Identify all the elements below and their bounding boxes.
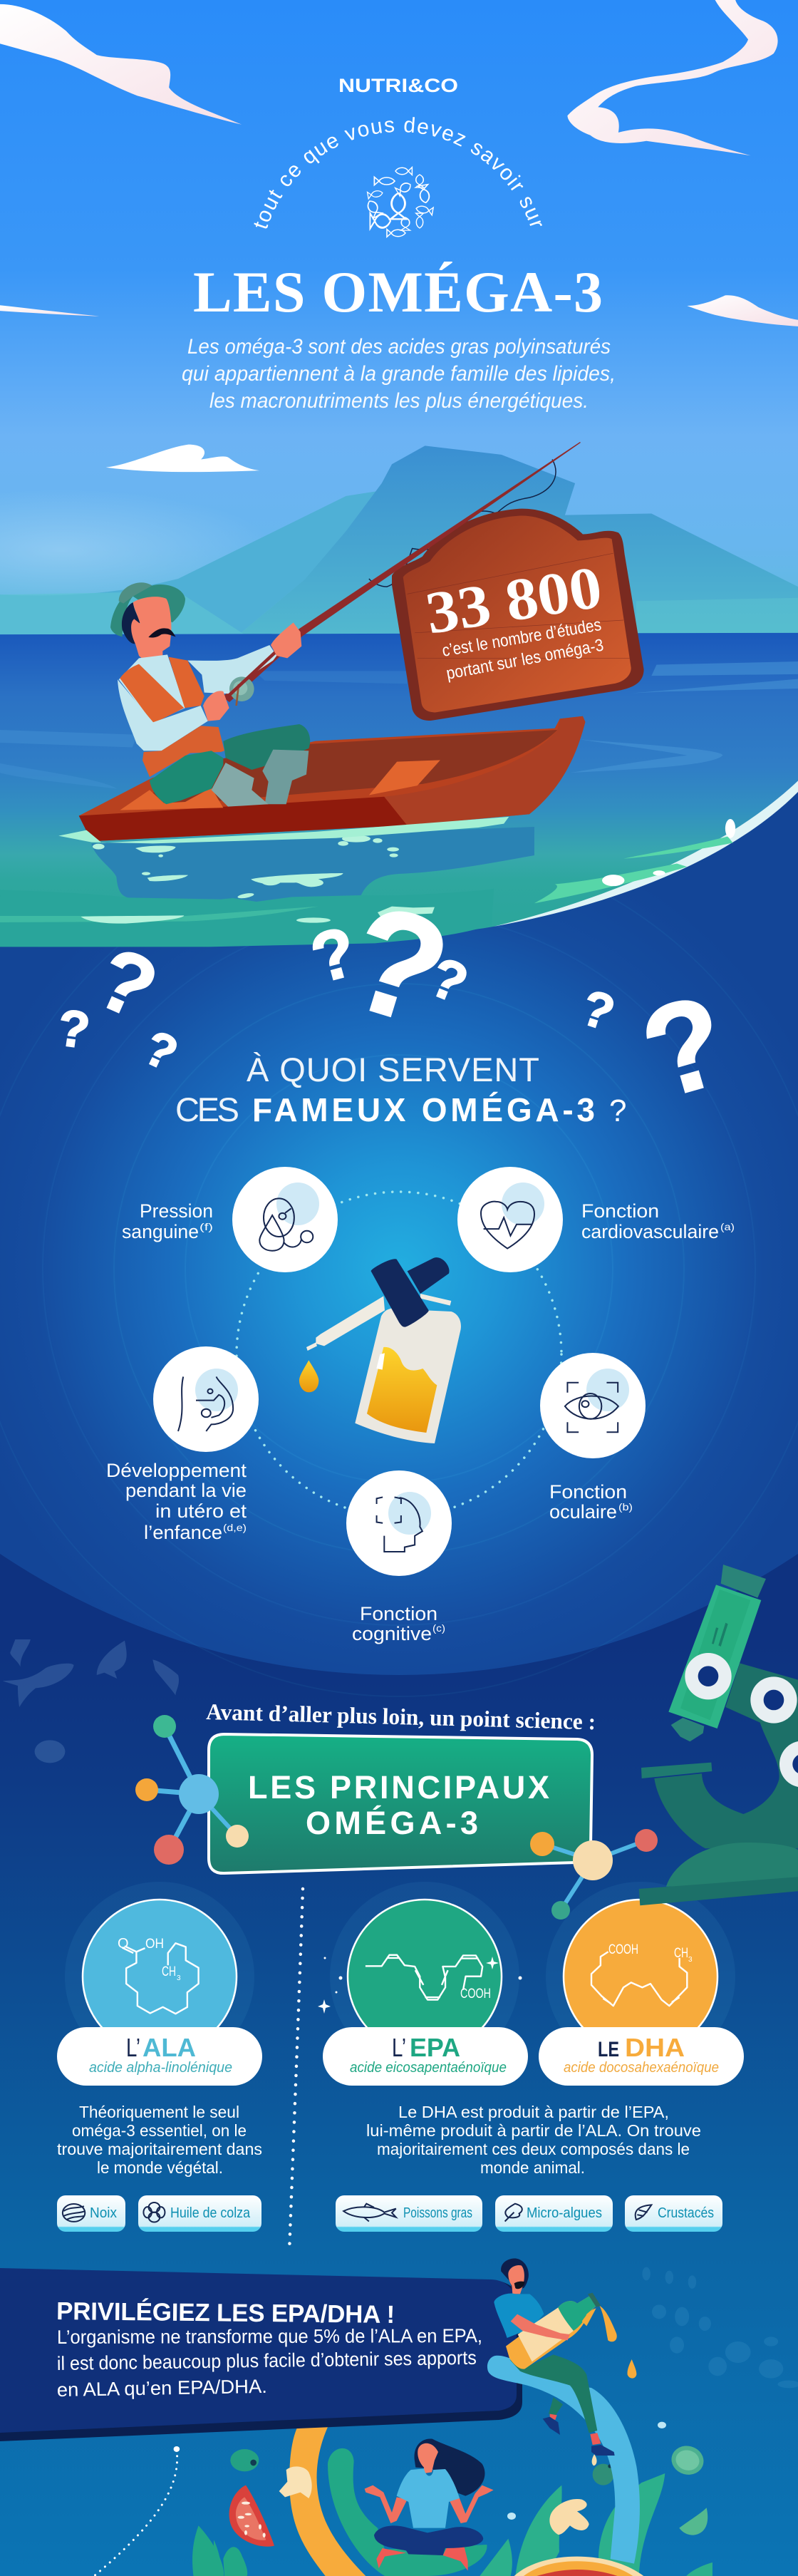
fishing line	[369, 460, 556, 587]
text: ALA description: trouve majoritairement dans	[57, 2140, 262, 2158]
circle: EPA	[330, 1882, 519, 2071]
scene: faint fish school and dotted trail	[94, 2267, 798, 2576]
sea	[0, 633, 798, 947]
soft light in the sky	[0, 503, 228, 594]
sky	[0, 0, 798, 642]
heading: functions: FAMEUX OMÉGA-3	[252, 1091, 595, 1128]
oil drop	[299, 1360, 318, 1392]
label: pression: Pression	[140, 1200, 213, 1222]
banner text: en ALA qu’en EPA/DHA.	[57, 2376, 267, 2401]
chip: noix	[57, 2195, 125, 2232]
question marks: ?	[83, 928, 171, 1039]
woman	[365, 2438, 494, 2571]
card: EPA name pill: L’	[392, 2033, 406, 2062]
circle: ALA	[65, 1882, 254, 2071]
label: development: pendant la vie	[125, 1480, 247, 1501]
sign heading: LES PRINCIPAUX	[248, 1769, 549, 1805]
text: EPA DHA description: monde animal.	[480, 2158, 585, 2177]
dotted divider	[289, 1889, 303, 2252]
man	[494, 2258, 615, 2456]
chip: poissons gras: Poissons gras	[403, 2205, 472, 2221]
scene: sea with boat and sign	[0, 445, 798, 947]
head	[121, 597, 175, 658]
circle: cardiovascular	[457, 1167, 563, 1272]
left molecule sticks	[147, 1726, 237, 1850]
card: ALA name pill	[57, 2027, 262, 2086]
molecule structure ALA	[122, 1943, 199, 2014]
grapefruit	[514, 2557, 643, 2576]
wooden sign	[392, 509, 644, 721]
circle: cognition	[346, 1470, 452, 1576]
circle: DHA	[546, 1882, 735, 2071]
waves	[0, 661, 798, 773]
arc subtitle: tout ce que vous devez savoir sur	[254, 117, 542, 228]
title: LES OMÉGA-3	[193, 259, 603, 324]
sparkles	[318, 1957, 522, 2014]
microscope base	[639, 1877, 798, 1905]
label: development: l’enfance	[144, 1522, 222, 1543]
heading: functions: ?	[609, 1093, 626, 1128]
label: development: Développement	[106, 1460, 247, 1481]
leaves left	[214, 2540, 247, 2576]
shirt and vest	[118, 645, 276, 777]
fisherman	[110, 582, 310, 810]
panel: function circles	[153, 1167, 646, 1576]
chip: crustacés: Crustacés	[658, 2205, 714, 2221]
lime slices	[668, 2442, 708, 2535]
card: ALA name pill: acide alpha-linolénique	[89, 2060, 232, 2076]
molecule labels: COOH	[460, 1987, 491, 2001]
question marks: ?	[627, 967, 742, 1127]
intro text: qui appartiennent à la grande famille des lipides,	[182, 362, 616, 386]
molecule labels: CH	[674, 1946, 688, 1961]
fishing rod	[222, 442, 581, 702]
card: DHA name pill	[539, 2027, 744, 2086]
olive	[230, 2449, 259, 2471]
card: DHA name pill: acide docosahexaénoïque	[564, 2060, 719, 2076]
question marks: ?	[422, 944, 477, 1016]
chip: huile de colza	[138, 2195, 261, 2232]
label: cardio: cardiovasculaire	[581, 1221, 719, 1242]
chip: micro-algues	[495, 2195, 613, 2232]
blue stream	[487, 2356, 640, 2564]
label: development	[106, 1460, 247, 1543]
pear	[593, 2464, 614, 2485]
label: pression: (f)	[200, 1221, 213, 1232]
chip: noix: Noix	[90, 2205, 117, 2221]
label: cardio: (a)	[720, 1221, 735, 1232]
chip: huile de colza: Huile de colza	[170, 2205, 251, 2221]
question marks: ?	[136, 1020, 186, 1081]
green arc	[328, 2448, 487, 2576]
chip: crustacés	[625, 2195, 722, 2232]
text: EPA DHA description: majoritairement ces deux composés dans le	[377, 2140, 690, 2158]
card: EPA name pill: acide eicosapentaénoïque	[350, 2060, 507, 2076]
text: ALA description	[57, 2103, 262, 2177]
banner text: il est donc beaucoup plus facile d’obtenir ses apports	[57, 2347, 477, 2374]
reel	[226, 651, 276, 706]
hands	[203, 622, 301, 721]
nut	[549, 2499, 589, 2535]
boat	[79, 716, 585, 841]
hat	[110, 582, 185, 637]
microscope	[641, 1565, 798, 1887]
scene: woman meditating with food	[214, 2427, 494, 2576]
legs	[150, 724, 310, 807]
text: EPA DHA description	[366, 2103, 701, 2177]
foam around hull	[58, 817, 509, 843]
seat	[120, 788, 223, 810]
icon: oil bottle with dropper	[299, 1257, 461, 1443]
molecule: right with sticks	[530, 1829, 658, 1920]
intro text	[182, 335, 616, 413]
chip: micro-algues: Micro-algues	[527, 2205, 602, 2221]
sign text	[428, 569, 603, 683]
label: cognitive: cognitive	[352, 1623, 432, 1644]
label: oculaire	[549, 1481, 633, 1523]
circle: eye	[540, 1353, 646, 1458]
label: cognitive: (c)	[432, 1622, 445, 1634]
question marks: ?	[303, 911, 364, 998]
question marks: ?	[331, 872, 467, 1058]
text: EPA DHA description: lui-même produit à partir de l’ALA. On trouve	[366, 2121, 701, 2140]
intro text: les macronutriments les plus énergétiques.	[209, 389, 589, 413]
label: oculaire: oculaire	[549, 1501, 617, 1523]
intro: point science: Avant d’aller plus loin, un point science :	[206, 1699, 596, 1734]
caption: c’est le nombre d’études	[441, 615, 603, 661]
question marks: ?	[575, 979, 621, 1041]
question marks	[54, 872, 742, 1127]
green title sign: OMÉGA-3	[306, 1805, 478, 1841]
circle: blood pressure	[232, 1167, 338, 1272]
text: ALA description: Théoriquement le seul	[79, 2103, 239, 2121]
molecule labels: OH	[145, 1937, 164, 1952]
circle: development	[153, 1346, 259, 1452]
label: development: in utéro et	[155, 1500, 247, 1522]
molecule labels: 3	[177, 1974, 181, 1982]
question marks: ?	[54, 999, 93, 1060]
card: DHA name pill: LE	[598, 2038, 619, 2061]
molecule structure EPA	[366, 1955, 482, 2000]
label: cognitive	[352, 1603, 445, 1644]
card: ALA name pill: ALA	[142, 2033, 196, 2062]
text: EPA DHA description: Le DHA est produit à partir de l’EPA,	[398, 2103, 669, 2121]
label: pression: sanguine	[122, 1221, 199, 1242]
card: EPA name pill: EPA	[410, 2033, 460, 2062]
scene: boat and sign	[58, 460, 644, 843]
clouds	[0, 0, 798, 326]
dotted ring around bottle	[237, 1192, 561, 1517]
oil bottle	[506, 2293, 601, 2369]
leaves right	[480, 2473, 712, 2576]
panel: radial glow behind functions section	[0, 792, 798, 1697]
mountains	[0, 445, 798, 634]
leaves left of scene	[192, 2525, 224, 2576]
logo: NUTRI&CO	[338, 75, 458, 96]
molecule labels	[118, 1936, 693, 2001]
fish silhouettes	[3, 1639, 179, 1763]
molecule labels: CH	[162, 1964, 176, 1979]
label: development: (d,e)	[223, 1522, 247, 1533]
small cloud	[106, 445, 259, 472]
foam on the wave edge	[494, 780, 798, 927]
label: pression	[122, 1200, 213, 1242]
tomato	[229, 2485, 274, 2547]
heading: functions	[175, 1051, 626, 1128]
nut on arc	[279, 2466, 312, 2498]
icon: fish forming an egg	[365, 168, 433, 237]
text: ALA description: oméga-3 essentiel, on le	[72, 2121, 247, 2140]
heading: functions: CES	[175, 1091, 239, 1128]
molecule labels: COOH	[608, 1942, 638, 1957]
banner: advice	[0, 2268, 522, 2441]
sign text: portant sur les oméga-3	[445, 636, 605, 684]
molecule labels: 3	[688, 1956, 693, 1964]
card: DHA name pill: DHA	[625, 2033, 685, 2062]
scene: man pouring oil over a stream	[480, 2258, 712, 2576]
dots	[507, 2422, 666, 2520]
water near boat: reflection, bands and foam	[0, 827, 534, 947]
label: cardio	[581, 1200, 735, 1242]
food chips	[57, 2195, 722, 2232]
card: ALA name pill: L’	[126, 2033, 140, 2062]
poured oil	[600, 2306, 636, 2379]
text: ALA description: le monde végétal.	[97, 2158, 223, 2177]
deep ocean background	[0, 1554, 798, 2576]
banner text	[57, 2325, 482, 2401]
molecule structure DHA	[591, 1952, 687, 2006]
intro text: Les oméga-3 sont des acides gras polyinsaturés	[187, 335, 611, 359]
molecule: left	[135, 1715, 249, 1865]
banner heading: PRIVILÉGIEZ LES EPA/DHA !	[56, 2297, 395, 2329]
orange arc	[289, 2427, 366, 2576]
molecule labels: O	[118, 1936, 129, 1952]
label: oculaire: (b)	[618, 1501, 633, 1513]
number: 33 800	[421, 554, 606, 647]
label: cardio: Fonction	[581, 1200, 659, 1222]
banner text: L’organisme ne transforme que 5% de l’ALA en EPA,	[57, 2325, 482, 2348]
heading: functions: À QUOI SERVENT	[247, 1051, 539, 1088]
card: EPA name pill	[323, 2027, 528, 2086]
green title sign	[209, 1734, 592, 1873]
label: oculaire: Fonction	[549, 1481, 627, 1503]
chip: poissons gras	[336, 2195, 482, 2232]
label: cognitive: Fonction	[360, 1603, 437, 1624]
function labels	[106, 1200, 735, 1644]
